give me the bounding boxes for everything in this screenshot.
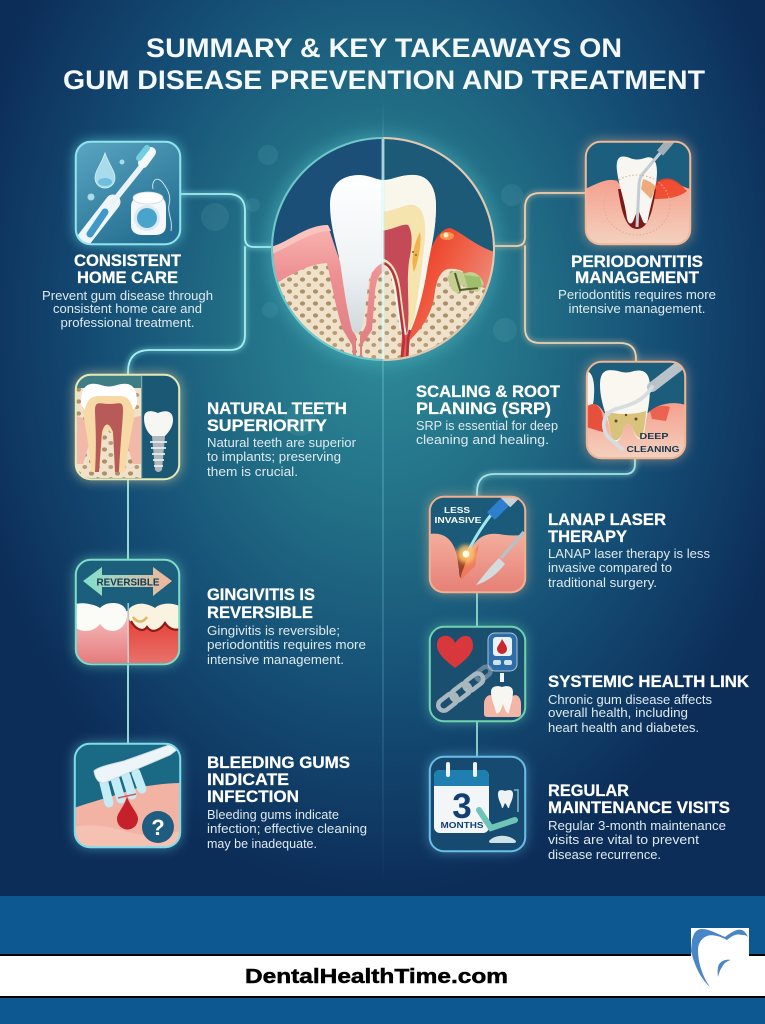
text: consistent home care: Prevent gum disease through (42, 289, 213, 303)
icon: chain links (436, 665, 492, 713)
text: regular maintenance visits: visits are vital to prevent (548, 833, 700, 847)
icon: calendar: 3 (452, 787, 472, 826)
title: GUM DISEASE PREVENTION AND TREATMENT (63, 65, 706, 95)
text: periodontitis management: Periodontitis requires more (558, 288, 716, 302)
bone lesion (447, 271, 484, 294)
icon: toothbrush (94, 744, 178, 803)
text: systemic health link: heart health and diabetes. (548, 721, 699, 735)
text: gingivitis is reversible: periodontitis requires more (207, 638, 366, 652)
panel: periodontitis management (585, 139, 691, 245)
text: lanap laser therapy: LANAP LASER (548, 511, 666, 529)
icon: heart (437, 636, 473, 668)
tooth (330, 175, 436, 335)
panel: regular maintenance visits (429, 756, 526, 852)
panel: lanap laser therapy (429, 492, 526, 593)
text: bleeding gums indicate infection: Bleeding gums indicate (207, 808, 339, 822)
text: regular maintenance visits (548, 782, 730, 862)
title: SUMMARY & KEY TAKEAWAYS ON (146, 33, 622, 63)
text: lanap laser therapy: invasive compared to (548, 561, 672, 575)
gum tissue with pocket (429, 534, 526, 593)
gum surface (74, 783, 181, 848)
dental implant (144, 411, 173, 472)
bone (274, 258, 492, 359)
text: consistent home care: CONSISTENT (74, 252, 181, 270)
text: periodontitis management: MANAGEMENT (575, 269, 699, 287)
text: bleeding gums indicate infection: infection; effective cleaning (207, 822, 367, 836)
text: natural teeth superiority: SUPERIORITY (207, 417, 327, 435)
text: lanap laser therapy: THERAPY (548, 528, 627, 546)
title (63, 33, 706, 95)
text: gingivitis is reversible: REVERSIBLE (207, 604, 313, 622)
text: scaling and root planing: SCALING & ROOT (416, 383, 560, 401)
label: less invasive: LESS (444, 505, 470, 515)
text: scaling and root planing (416, 383, 560, 447)
text: periodontitis management: PERIODONTITIS (571, 253, 703, 271)
tooth cross-section (383, 175, 436, 358)
inflamed gum (400, 228, 493, 358)
text: consistent home care: HOME CARE (77, 269, 178, 287)
text: gingivitis is reversible: intensive management. (207, 653, 344, 667)
icon: question mark badge: ? (151, 815, 165, 840)
icon: reversible arrow: REVERSIBLE (96, 578, 160, 588)
text: systemic health link: Chronic gum disease affects (548, 693, 712, 707)
left connector network (128, 194, 272, 743)
panel: scaling and root planing (586, 361, 686, 459)
text: bleeding gums indicate infection (207, 754, 367, 851)
text: bleeding gums indicate infection: INDICATE (207, 771, 289, 789)
text: natural teeth superiority: them is crucial. (207, 465, 298, 479)
text: natural teeth superiority: to implants; preserving (207, 450, 341, 464)
panel: systemic health link (429, 626, 526, 722)
text: regular maintenance visits: disease recurrence. (548, 848, 661, 862)
text: lanap laser therapy (548, 511, 710, 590)
text: bleeding gums indicate infection: BLEEDING GUMS (207, 754, 350, 772)
icon: scalpel (476, 532, 524, 585)
icon: periodontal probe (637, 139, 672, 227)
logo: tooth (691, 928, 749, 987)
text: bleeding gums indicate infection: INFECTION (207, 788, 299, 806)
panel: natural teeth superiority (75, 374, 180, 480)
label: deep cleaning: CLEANING (626, 444, 680, 454)
text: scaling and root planing: cleaning and healing. (416, 433, 549, 447)
text: regular maintenance visits: REGULAR (548, 782, 629, 800)
text: periodontitis management: intensive management. (568, 302, 706, 316)
icon: floss box (131, 179, 171, 235)
icon: calendar (434, 762, 489, 833)
text: lanap laser therapy: traditional surgery. (548, 576, 657, 590)
text: gingivitis is reversible: GINGIVITIS IS (207, 586, 315, 604)
text: natural teeth superiority (207, 400, 356, 479)
icon: blood drop (117, 794, 138, 830)
bokeh lights (201, 145, 523, 436)
panel: gingivitis is reversible (75, 559, 180, 665)
text: systemic health link: overall health, including (548, 706, 688, 720)
text: lanap laser therapy: LANAP laser therapy is less (548, 547, 710, 561)
label: less invasive (434, 505, 482, 525)
center vertical line (382, 98, 384, 888)
icon: calendar: MONTHS (440, 820, 484, 830)
icon: toothbrush (82, 148, 151, 242)
center tooth illustration (267, 133, 500, 365)
gum and bone (586, 403, 686, 459)
gum tissue (585, 180, 691, 245)
text: gingivitis is reversible: Gingivitis is reversible; (207, 624, 340, 638)
text: scaling and root planing: PLANING (SRP) (416, 400, 551, 418)
label: deep cleaning (626, 431, 680, 454)
icon: scaler instrument (604, 367, 678, 449)
icon: glucose meter (488, 633, 517, 682)
tooth (617, 156, 657, 224)
icon: tooth and gum (484, 686, 521, 717)
text: scaling and root planing: SRP is essential for deep (416, 419, 558, 433)
text: consistent home care: professional treatment. (60, 316, 194, 330)
label: deep cleaning: DEEP (640, 431, 669, 441)
natural tooth cross-section (75, 374, 141, 480)
text: bleeding gums indicate infection: may be inadequate. (207, 837, 317, 851)
icon: dental chair and tooth (479, 790, 518, 843)
icon: water drop (88, 153, 124, 200)
panel: consistent home care (75, 141, 181, 245)
periodontal pocket (618, 189, 656, 229)
text: regular maintenance visits: Regular 3-month maintenance (548, 819, 726, 833)
text: regular maintenance visits: MAINTENANCE VISITS (548, 799, 730, 817)
healthy gum (273, 231, 384, 357)
text: natural teeth superiority: Natural teeth are superior (207, 436, 356, 450)
text: systemic health link: SYSTEMIC HEALTH LINK (548, 673, 749, 691)
text: consistent home care (42, 252, 213, 330)
neighbouring tooth (586, 371, 594, 406)
text: systemic health link (548, 673, 749, 735)
website address: DentalHealthTime.com (245, 965, 508, 988)
inflamed gum and teeth (128, 604, 180, 665)
text: consistent home care: consistent home care and (53, 302, 202, 316)
text: gingivitis is reversible (207, 586, 366, 667)
healthy gum and teeth (75, 603, 128, 665)
tooth with calculus (600, 370, 650, 442)
icon: laser beam and handpiece (467, 492, 515, 553)
connector lines (128, 193, 636, 756)
right connector network (477, 193, 636, 756)
label: less invasive: INVASIVE (434, 515, 482, 525)
footer (0, 896, 765, 1024)
text: natural teeth superiority: NATURAL TEETH (207, 400, 347, 418)
panel: bleeding gums indicate infection (74, 743, 181, 848)
text: periodontitis management (558, 253, 716, 316)
